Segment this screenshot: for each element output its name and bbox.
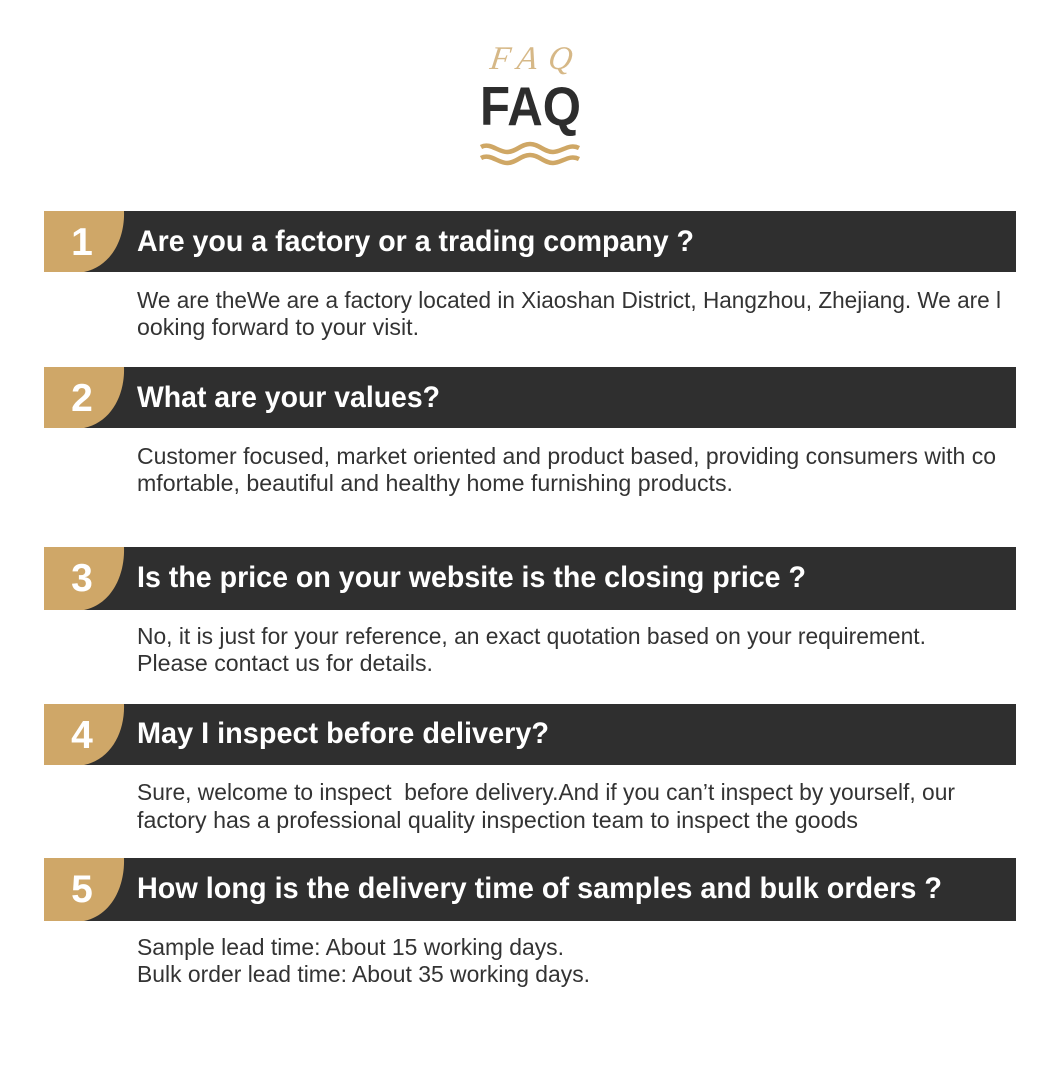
gold number tab 2 (44, 367, 124, 428)
panel: question 1 (44, 211, 1016, 340)
question 3 text: Is the price on your website is the closing price ? (137, 561, 806, 594)
main heading: FAQ (480, 75, 581, 137)
number 5: 5 (71, 868, 93, 911)
header bar 3 (44, 547, 1016, 610)
number 4: 4 (71, 714, 93, 757)
gold number tab 1 (44, 211, 124, 272)
answer 2 text: Customer focused, market oriented and product based, providing consumers with co (137, 443, 996, 469)
number 1: 1 (71, 221, 93, 264)
question 5 text: How long is the delivery time of samples and bulk orders ? (137, 872, 942, 905)
header bar 1 (44, 211, 1016, 272)
answer 5 text (137, 934, 590, 987)
answer 1 text: ooking forward to your visit. (137, 314, 419, 340)
script subtitle: FAQ (487, 40, 575, 77)
gold number tab 4 (44, 704, 124, 765)
header bar 5 (44, 858, 1016, 921)
answer 3 text: Please contact us for details. (137, 650, 433, 676)
panel: question 3 (44, 547, 1016, 676)
question 4 text: May I inspect before delivery? (137, 717, 549, 750)
answer 5 text: Sample lead time: About 15 working days. (137, 934, 564, 960)
answer 3 text: No, it is just for your reference, an exact quotation based on your requirement. (137, 623, 926, 649)
answer 1 text: We are theWe are a factory located in Xiaoshan District, Hangzhou, Zhejiang. We are l (137, 287, 1001, 313)
number 3: 3 (71, 557, 93, 600)
answer 3 text (137, 623, 926, 676)
answer 2 text (137, 443, 996, 496)
answer 1 text (137, 287, 1001, 340)
answer 4 text: Sure, welcome to inspect before delivery.And if you can’t inspect by yourself, our (137, 779, 955, 805)
title block (480, 40, 581, 163)
number 2: 2 (71, 377, 93, 420)
gold number tab 3 (44, 547, 124, 610)
header bar 2 (44, 367, 1016, 428)
answer 4 text (137, 779, 955, 833)
question 2 text: What are your values? (137, 381, 440, 414)
panel: question 5 (44, 858, 1016, 987)
gold number tab 5 (44, 858, 124, 921)
answer 4 text: factory has a professional quality inspection team to inspect the goods (137, 807, 858, 833)
header bar 4 (44, 704, 1016, 765)
answer 2 text: mfortable, beautiful and healthy home furnishing products. (137, 470, 733, 496)
panel: question 2 (44, 367, 1016, 496)
panel: question 4 (44, 704, 1016, 833)
icon: double wave (481, 144, 579, 163)
answer 5 text: Bulk order lead time: About 35 working days. (137, 961, 590, 987)
question 1 text: Are you a factory or a trading company ? (137, 225, 694, 258)
